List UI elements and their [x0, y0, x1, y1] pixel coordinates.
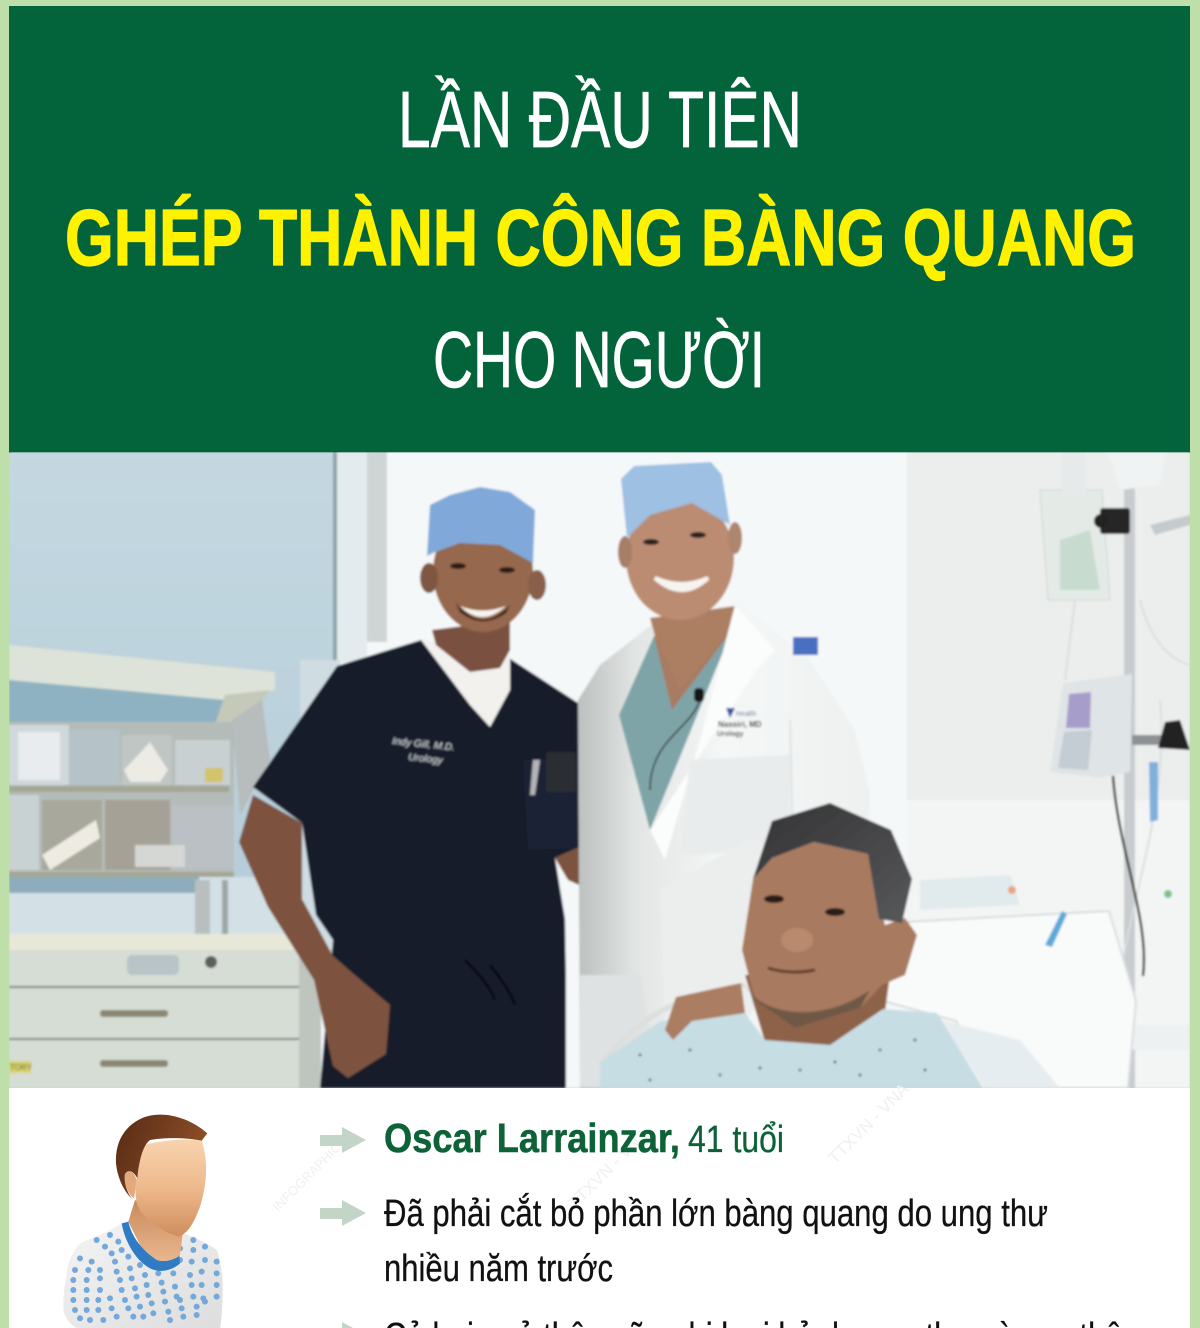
patient: pillow, head, hand and gown: [600, 803, 1136, 1088]
bullet: patient name and age: 41 tuổi: [688, 1119, 784, 1161]
title line 1: LẦN ĐẦU TIÊN: [398, 75, 802, 164]
arrow: bullet 2: [320, 1200, 366, 1226]
watermark text: TTXVN - VNA: [564, 1124, 653, 1213]
photo: doctors and patient in hospital room: [9, 452, 1190, 1088]
bullet: medical history: Đã phải cắt bỏ phần lớn bàng quang do ung thư: [384, 1192, 1048, 1235]
arrow: bullet 3: [320, 1322, 366, 1328]
watermark text: INFOGRAPHICS: [270, 1133, 350, 1214]
doctor 2: white coat and head: [578, 462, 870, 1088]
doctor 2: white coat and head: Urology: [717, 731, 744, 738]
IV pole and infusion equipment: [920, 452, 1190, 1088]
watermark text: [270, 1079, 913, 1214]
doctor 1: scrubs and arm: Indy Gill, M.D.: [392, 736, 455, 754]
bullet: medical history: [384, 1192, 1048, 1290]
doctor 2: white coat and head: Health: [736, 711, 756, 718]
doctor 1: scrubs and arm: [239, 487, 590, 1088]
doctor 1: scrubs and arm: Urology: [408, 752, 444, 767]
drawer cabinet: TORY: [10, 1063, 33, 1072]
bullet: patient name and age: Oscar Larrainzar,: [384, 1115, 680, 1161]
icon: patient in dotted gown: [63, 1115, 223, 1328]
arrow: bullet 1: [320, 1127, 366, 1153]
wall shelf and bins: [9, 645, 299, 937]
panel: title header: [9, 6, 1190, 453]
drawer cabinet: [9, 934, 321, 1088]
watermark text: TTXVN - VNA: [824, 1079, 913, 1168]
panel: patient details: [9, 1088, 1190, 1328]
title line 3: CHO NGƯỜI: [433, 315, 765, 404]
bullet: medical history: nhiều năm trước: [384, 1248, 613, 1290]
doctor 2: white coat and head: Nassiri, MD: [718, 720, 762, 729]
